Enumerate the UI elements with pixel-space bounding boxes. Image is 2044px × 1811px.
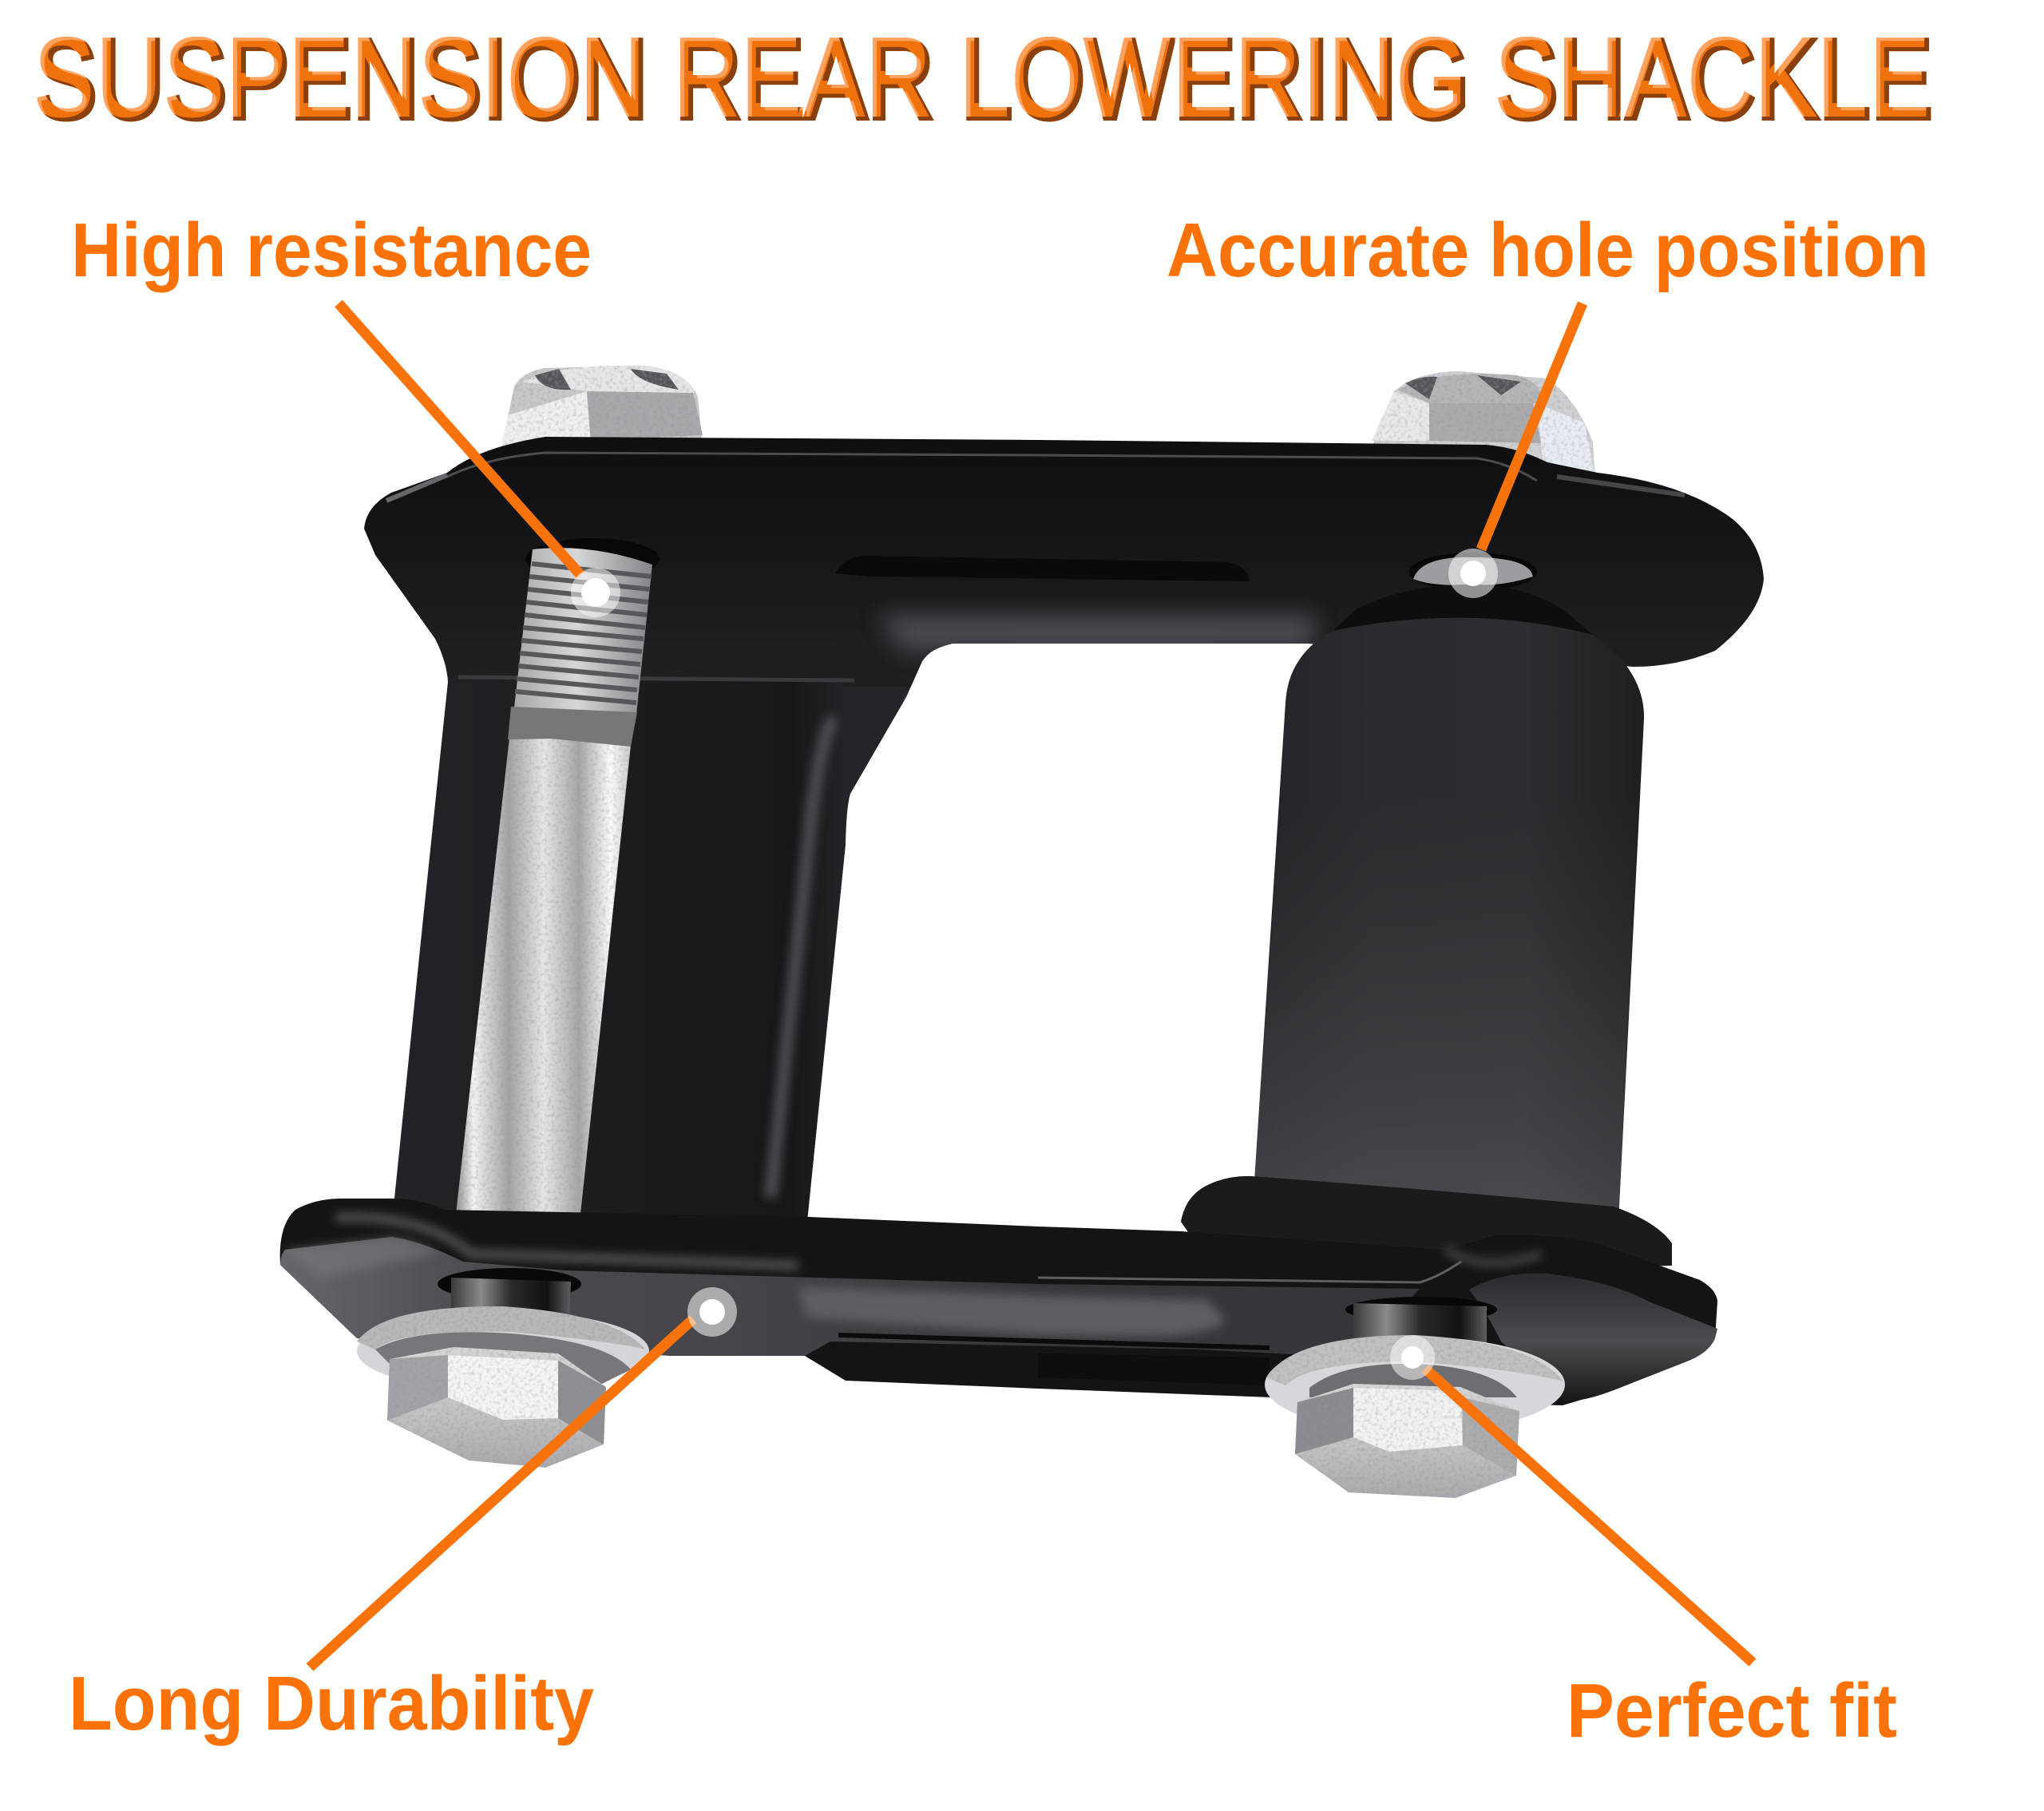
nut bbox=[387, 1347, 606, 1468]
lower plate face bbox=[280, 1237, 1420, 1357]
nut bbox=[1295, 1384, 1519, 1498]
label: Accurate hole position bbox=[1167, 208, 1929, 293]
leader line bbox=[310, 1319, 693, 1667]
washer bbox=[357, 1306, 649, 1391]
marker dot bbox=[1390, 1335, 1435, 1380]
marker dot bbox=[687, 1287, 737, 1337]
callout: perfect fit bbox=[1390, 1335, 1897, 1754]
marker dot bbox=[1448, 549, 1498, 598]
top left nut bbox=[501, 366, 703, 447]
product photo: rear lowering shackle bbox=[280, 366, 1781, 1498]
label: Long Durability bbox=[69, 1661, 594, 1746]
lower plate slot bbox=[798, 1287, 1223, 1337]
marker dot bbox=[571, 568, 620, 617]
bushing cylinder bbox=[1254, 585, 1644, 1222]
bushing flange bbox=[1181, 1176, 1672, 1270]
lower right bolt bbox=[1265, 1297, 1565, 1498]
callout: accurate hole position bbox=[1167, 208, 1929, 598]
hole washer bbox=[1409, 553, 1537, 591]
bolt hole bbox=[525, 538, 660, 580]
shank bbox=[451, 1278, 571, 1341]
upper slot bbox=[835, 556, 1250, 581]
leader line bbox=[1425, 1369, 1753, 1662]
label: Perfect fit bbox=[1567, 1668, 1897, 1754]
leader line bbox=[1481, 303, 1583, 549]
lower left bolt bbox=[357, 1268, 649, 1468]
leader line bbox=[339, 303, 580, 575]
shank bbox=[1353, 1303, 1487, 1357]
threads bbox=[514, 548, 652, 715]
upper plate and left leg bbox=[351, 423, 1781, 1230]
lower plate right end bbox=[1469, 1274, 1717, 1401]
lower plate bbox=[280, 1199, 1717, 1405]
top right nut bbox=[1372, 371, 1595, 479]
callout: long durability bbox=[69, 1287, 737, 1746]
bolt hole bbox=[1345, 1297, 1497, 1322]
callout: high resistance bbox=[71, 208, 620, 617]
bolt hole bbox=[438, 1268, 581, 1300]
threaded bolt bbox=[456, 538, 660, 1214]
smooth shaft bbox=[456, 738, 632, 1214]
label: High resistance bbox=[71, 208, 592, 293]
washer bbox=[1265, 1335, 1565, 1433]
